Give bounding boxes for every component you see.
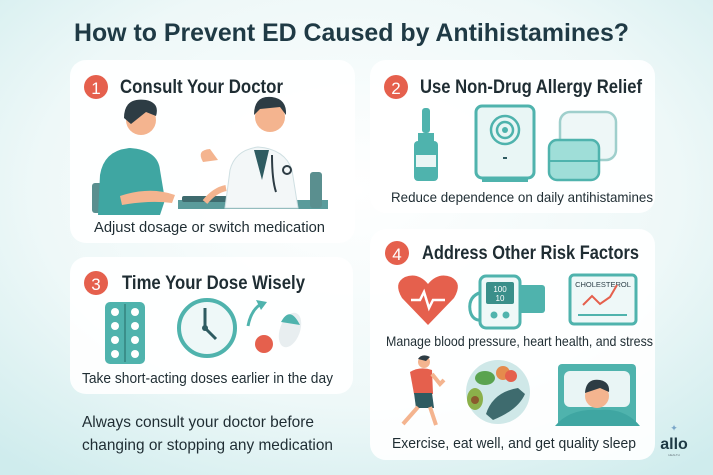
badge 1 [84, 75, 108, 99]
icon: clock [179, 300, 235, 356]
panel: non-drug allergy relief [370, 60, 655, 213]
icon: sleeping person [555, 364, 640, 426]
heading 4: Address Other Risk Factors [422, 243, 639, 264]
badge 4: 4 [392, 245, 402, 264]
footer note: changing or stopping any medication [82, 437, 333, 454]
caption 4b: Exercise, eat well, and get quality sleep [392, 435, 636, 452]
footer note [82, 414, 333, 454]
badge 3: 3 [91, 275, 101, 294]
logo: allo health: HEALTH [668, 453, 680, 457]
icon: air purifier [476, 106, 534, 182]
caption 4a: Manage blood pressure, heart health, and stress [386, 333, 653, 349]
icon: blood pressure monitor: 100 [493, 285, 507, 294]
panel: consult your doctor [70, 60, 355, 243]
heading 1: Consult Your Doctor [120, 77, 284, 98]
logo: allo health: allo [660, 436, 688, 453]
icon: plate of food [466, 360, 530, 424]
icon: cholesterol chart: CHOLESTEROL [575, 280, 631, 289]
icon: pills with arrow [248, 300, 306, 353]
logo: allo health: ✦ [670, 423, 678, 433]
logo: allo health [660, 423, 688, 457]
badge 3 [84, 271, 108, 295]
caption 2: Reduce dependence on daily antihistamines [391, 189, 653, 205]
caption 3: Take short-acting doses earlier in the day [82, 370, 333, 387]
icon: blood pressure monitor: 10 [496, 294, 505, 303]
badge 1: 1 [91, 79, 101, 98]
icon: pillows [549, 112, 616, 180]
icon: blister pack [105, 302, 145, 364]
panel: time your dose [70, 257, 353, 394]
icon: nasal spray [414, 108, 438, 181]
badge 2 [384, 75, 408, 99]
badge 4 [385, 241, 409, 265]
heading 3: Time Your Dose Wisely [122, 273, 305, 294]
caption 1: Adjust dosage or switch medication [94, 219, 325, 236]
panel: other risk factors [370, 229, 655, 460]
illustration: patient and doctor [92, 97, 328, 215]
heading 2: Use Non-Drug Allergy Relief [420, 77, 643, 98]
icon: blood pressure monitor [470, 276, 545, 328]
icon: runner [403, 355, 444, 425]
title: How to Prevent ED Caused by Antihistamines? [74, 19, 629, 47]
badge 2: 2 [391, 79, 401, 98]
icon: heart [398, 276, 458, 325]
footer note: Always consult your doctor before [82, 414, 314, 431]
icon: cholesterol chart [570, 275, 636, 324]
